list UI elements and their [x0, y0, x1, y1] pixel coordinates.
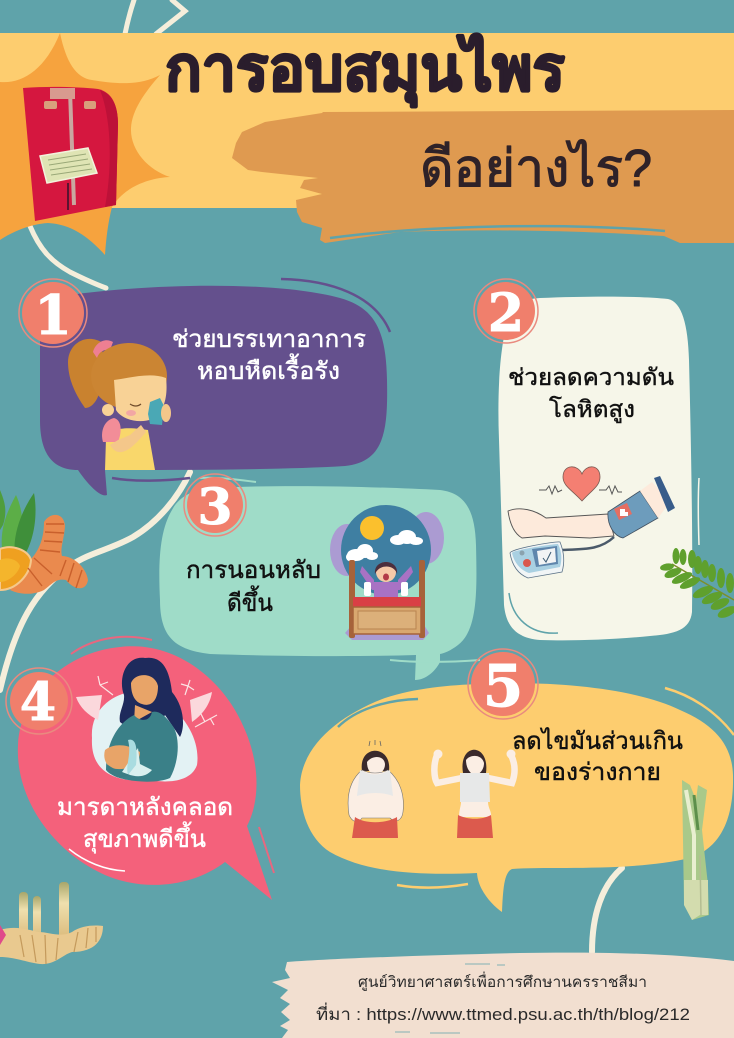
badge 4: 4 [20, 672, 56, 733]
text: benefit 5 [512, 727, 683, 786]
speech bubble 5 [300, 683, 734, 912]
badge 1: 1 [34, 283, 72, 347]
badge 2 [474, 279, 538, 344]
icon: monitor [510, 542, 564, 578]
orange starburst [0, 33, 170, 255]
text: benefit 2 [508, 364, 674, 423]
decorative line [0, 0, 622, 952]
header banner [0, 33, 734, 208]
speech bubble 3 [159, 478, 480, 680]
brush stroke behind subtitle [232, 110, 734, 243]
badge 2: 2 [488, 283, 524, 344]
text: benefit 1 [172, 326, 366, 385]
text: benefit 3: ดีขึ้น [227, 585, 273, 617]
illustration: girl with inhaler [68, 339, 171, 470]
text: benefit 4 [57, 794, 233, 854]
footer panel [272, 953, 734, 1038]
text: benefit 2: โลหิตสูง [549, 396, 635, 423]
text: benefit 4: สุขภาพดีขึ้น [83, 821, 206, 854]
text: source organisation: ศูนย์วิทยาศาสตร์เพื่อการศึกษานครราชสีมา [358, 971, 647, 991]
illustration: waking up in bed [330, 505, 444, 640]
text: benefit 5: ลดไขมันส่วนเกิน [512, 727, 683, 755]
turmeric [0, 490, 88, 594]
text: benefit 2: ช่วยลดความดัน [508, 364, 674, 390]
speech bubble 4 [18, 637, 274, 900]
speech bubble 1 [40, 279, 390, 495]
photo: herbal steam cabinet [23, 87, 118, 221]
illustration: overweight woman [348, 740, 403, 838]
illustration: slim woman [434, 750, 516, 838]
illustration: mother and baby [76, 658, 217, 782]
fern leaf [659, 548, 734, 620]
text: benefit 1: ช่วยบรรเทาอาการ [172, 326, 366, 353]
speech bubble 2 [498, 297, 699, 640]
badge 3: 3 [198, 477, 232, 536]
badge 4 [6, 668, 72, 734]
subtitle: ดีอย่างไร? [420, 139, 652, 198]
badge 5: 5 [483, 652, 523, 720]
text: benefit 3 [186, 557, 321, 617]
text: benefit 4: มารดาหลังคลอด [57, 794, 233, 821]
title: การอบสมุนไพร [165, 33, 565, 107]
lemongrass [682, 780, 709, 920]
badge 3 [184, 474, 246, 536]
illustration: blood pressure cuff [508, 467, 675, 578]
text: benefit 1: หอบหืดเรื้อรัง [197, 353, 340, 385]
text: benefit 5: ของร่างกาย [534, 759, 661, 786]
badge 5 [468, 649, 538, 720]
text: source URL: ที่มา : https://www.ttmed.psu.ac.th/th/blog/212 [316, 1002, 690, 1024]
badge 1 [19, 279, 87, 347]
text: benefit 3: การนอนหลับ [186, 557, 321, 584]
galangal rhizome [0, 882, 103, 964]
